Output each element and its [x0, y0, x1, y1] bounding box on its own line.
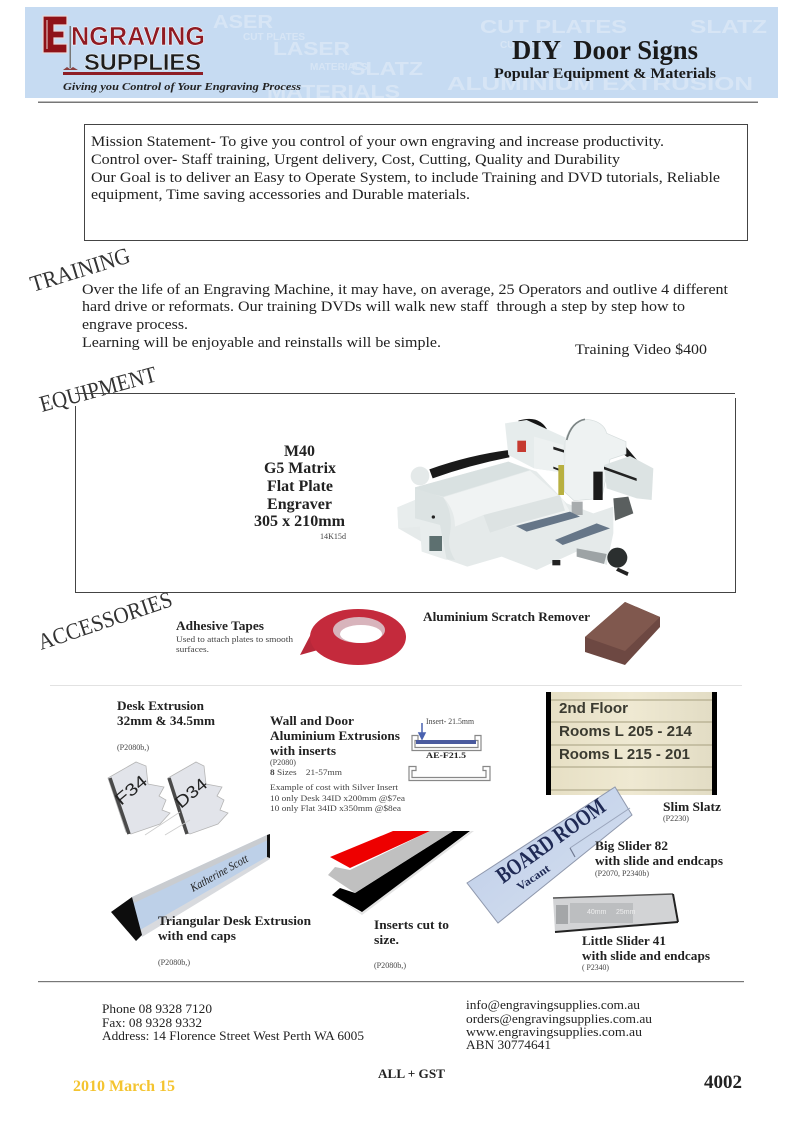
adhesive tapes text: Adhesive Tapes — [176, 619, 264, 633]
diagram: AE-F21.5 extrusion profile — [409, 717, 490, 780]
little slider label: Little Slider 41 — [582, 934, 666, 948]
tagline: Giving you Control of Your Engraving Process — [63, 81, 301, 93]
slim slatz label — [663, 800, 721, 823]
inserts label — [374, 918, 449, 970]
contact online: ABN 30774641 — [466, 1037, 551, 1052]
big slider label: (P2070, P2340b) — [595, 869, 649, 878]
image: red adhesive tape roll — [300, 609, 406, 665]
image: inserts cut to size — [328, 831, 474, 915]
header banner: ALUMINIUM EXTRUSION — [447, 74, 753, 94]
header banner: CUT PLATES — [500, 40, 562, 51]
image: F34 and D34 extrusions — [108, 762, 228, 835]
wall and door extrusions text: Wall and Door — [270, 714, 354, 728]
wall and door extrusions text: Aluminium Extrusions — [270, 729, 400, 743]
header banner: SLATZ — [690, 17, 767, 37]
heading: accessories: ACCESSORIES — [35, 587, 175, 655]
image: F34 and D34 extrusions: F34 — [111, 771, 151, 809]
image: M40 engraver machine — [397, 419, 653, 576]
header banner: MATERIALS — [267, 82, 400, 102]
equipment model text: Flat Plate — [267, 478, 333, 495]
slim slatz label: Slim Slatz — [663, 800, 721, 814]
inserts label: Inserts cut to — [374, 918, 449, 932]
training text: engrave process. — [82, 317, 188, 333]
triangular desk extrusion label — [158, 914, 311, 967]
big slider label: Big Slider 82 — [595, 839, 668, 853]
big slider label — [595, 839, 723, 878]
heading: training: TRAINING — [27, 243, 133, 297]
logo: Engraving Supplies — [43, 16, 205, 75]
contact address: Phone 08 9328 7120 — [102, 1001, 212, 1016]
equipment model text: M40 — [284, 443, 315, 460]
contact online: info@engravingsupplies.com.au — [466, 997, 641, 1012]
header banner: LASER — [273, 39, 350, 59]
training text — [82, 282, 729, 351]
wall and door extrusions text: 10 only Desk 34ID x200mm @$7ea — [270, 793, 405, 803]
wall and door extrusions text: (P2080) — [270, 758, 296, 767]
panel: mission statement: Mission Statement- To give you control of your own engraving and increase productivity. — [91, 134, 664, 150]
panel: mission statement — [84, 124, 748, 240]
logo: Engraving Supplies: SUPPLIES — [84, 49, 201, 75]
panel: mission statement: Control over- Staff training, Urgent delivery, Cost, Cutting, Quality and Durability — [91, 152, 621, 168]
triangular desk extrusion label: Triangular Desk Extrusion — [158, 914, 311, 928]
equipment model text: 305 x 210mm — [254, 513, 345, 530]
adhesive tapes text: Used to attach plates to smooth — [176, 634, 294, 644]
contact online: orders@engravingsupplies.com.au — [466, 1011, 653, 1026]
training text: Over the life of an Engraving Machine, it may have, on average, 25 Operators and outlive 4 different — [82, 282, 729, 298]
image: slim slatz sign — [546, 692, 717, 795]
image: little slider — [553, 894, 678, 932]
aluminium scratch remover label: Aluminium Scratch Remover — [423, 610, 590, 624]
training text: Learning will be enjoyable and reinstalls will be simple. — [82, 335, 441, 351]
date: 2010 March 15 — [73, 1078, 175, 1095]
image: F34 and D34 extrusions: D34 — [171, 774, 211, 812]
panel: equipment frame — [75, 394, 736, 592]
slim slatz label: (P2230) — [663, 814, 689, 823]
contact address: Fax: 08 9328 9332 — [102, 1015, 202, 1030]
adhesive tapes text — [176, 619, 294, 654]
GST note: ALL + GST — [378, 1067, 446, 1081]
image: slim slatz sign: Rooms L 215 - 201 — [559, 746, 690, 763]
training video price: Training Video $400 — [575, 342, 707, 358]
contact online: www.engravingsupplies.com.au — [466, 1024, 643, 1039]
big slider label: with slide and endcaps — [595, 854, 723, 868]
header banner — [25, 7, 778, 102]
panel: mission statement: Our Goal is to deliver an Easy to Operate System, to include Training and DVD tutorials, Reliable — [91, 170, 720, 186]
triangular desk extrusion label: (P2080b,) — [158, 958, 190, 967]
heading: equipment: EQUIPMENT — [37, 362, 159, 417]
header banner: ASER — [213, 12, 273, 32]
contact address — [102, 1001, 364, 1043]
wall and door extrusions text: 8 Sizes 21-57mm — [270, 767, 342, 777]
panel: mission statement: equipment, Time saving accessories and Durable materials. — [91, 187, 470, 203]
wall and door extrusions text — [270, 714, 405, 813]
equipment model text: G5 Matrix — [264, 460, 336, 477]
little slider label: ( P2340) — [582, 963, 609, 972]
image: board room big slider: Vacant — [515, 863, 552, 893]
equipment model text: 14K15d — [320, 532, 346, 541]
header banner: CUT PLATES — [480, 17, 627, 37]
subtitle: Popular Equipment & Materials — [494, 66, 716, 82]
wall and door extrusions text: Example of cost with Silver Insert — [270, 782, 399, 792]
image: little slider: 40mm — [587, 909, 607, 916]
wall and door extrusions text: with inserts — [270, 744, 336, 758]
page number: 4002 — [704, 1073, 742, 1093]
little slider label: with slide and endcaps — [582, 949, 710, 963]
little slider label — [582, 934, 710, 972]
diagram: AE-F21.5 extrusion profile: AE-F21.5 — [426, 750, 466, 760]
desk extrusion text: 32mm & 34.5mm — [117, 714, 216, 728]
logo: Engraving Supplies: NGRAVING — [71, 21, 205, 51]
image: board room big slider — [467, 787, 632, 923]
triangular desk extrusion label: with end caps — [158, 929, 236, 943]
training text: hard drive or reformats. Our training DVDs will walk new staff through a step by step how to — [82, 299, 685, 315]
header banner: CUT PLATES — [243, 32, 305, 43]
image: triangular desk extrusion: Katherine Scott — [187, 851, 251, 895]
wall and door extrusions text: 10 only Flat 34ID x350mm @$8ea — [270, 803, 401, 813]
contact address: Address: 14 Florence Street West Perth WA 6005 — [102, 1028, 364, 1043]
equipment model text — [254, 443, 346, 541]
image: little slider: 25mm — [616, 909, 636, 916]
image: slim slatz sign: 2nd Floor — [559, 700, 628, 717]
equipment model text: Engraver — [267, 496, 332, 513]
image: scratch remover block — [585, 602, 660, 665]
desk extrusion text — [117, 699, 216, 752]
image: triangular desk extrusion — [111, 834, 270, 941]
inserts label: (P2080b,) — [374, 961, 406, 970]
adhesive tapes text: surfaces. — [176, 644, 209, 654]
desk extrusion text: Desk Extrusion — [117, 699, 204, 713]
inserts label: size. — [374, 933, 399, 947]
desk extrusion text: (P2080b,) — [117, 743, 149, 752]
title: DIY Door Signs — [512, 35, 698, 65]
contact online — [466, 997, 653, 1052]
diagram: AE-F21.5 extrusion profile: Insert- 21.5mm — [426, 717, 475, 726]
header banner: MATERIALS — [310, 62, 368, 73]
header banner: SLATZ — [350, 59, 423, 79]
image: slim slatz sign: Rooms L 205 - 214 — [559, 723, 693, 740]
image: board room big slider: BOARD ROOM — [491, 793, 610, 888]
